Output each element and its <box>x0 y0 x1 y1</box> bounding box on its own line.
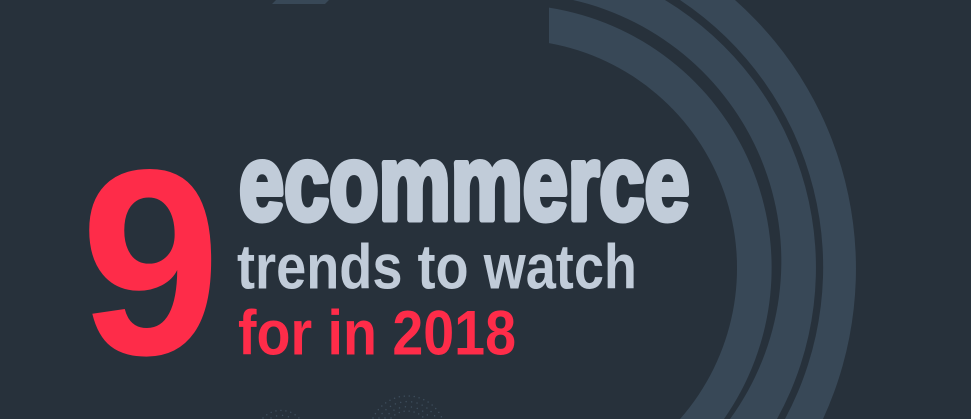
big number 9: 9 <box>80 114 221 410</box>
halftone dots right <box>373 396 442 418</box>
halftone dots left <box>263 410 299 418</box>
top edge fragment shape <box>272 0 329 4</box>
subheading: for in 2018: for in 2018 <box>238 298 516 368</box>
subheading: trends to watch: trends to watch <box>237 232 637 302</box>
heading: ecommerce: ecommerce <box>239 124 690 243</box>
concentric arcs decoration <box>549 0 856 419</box>
